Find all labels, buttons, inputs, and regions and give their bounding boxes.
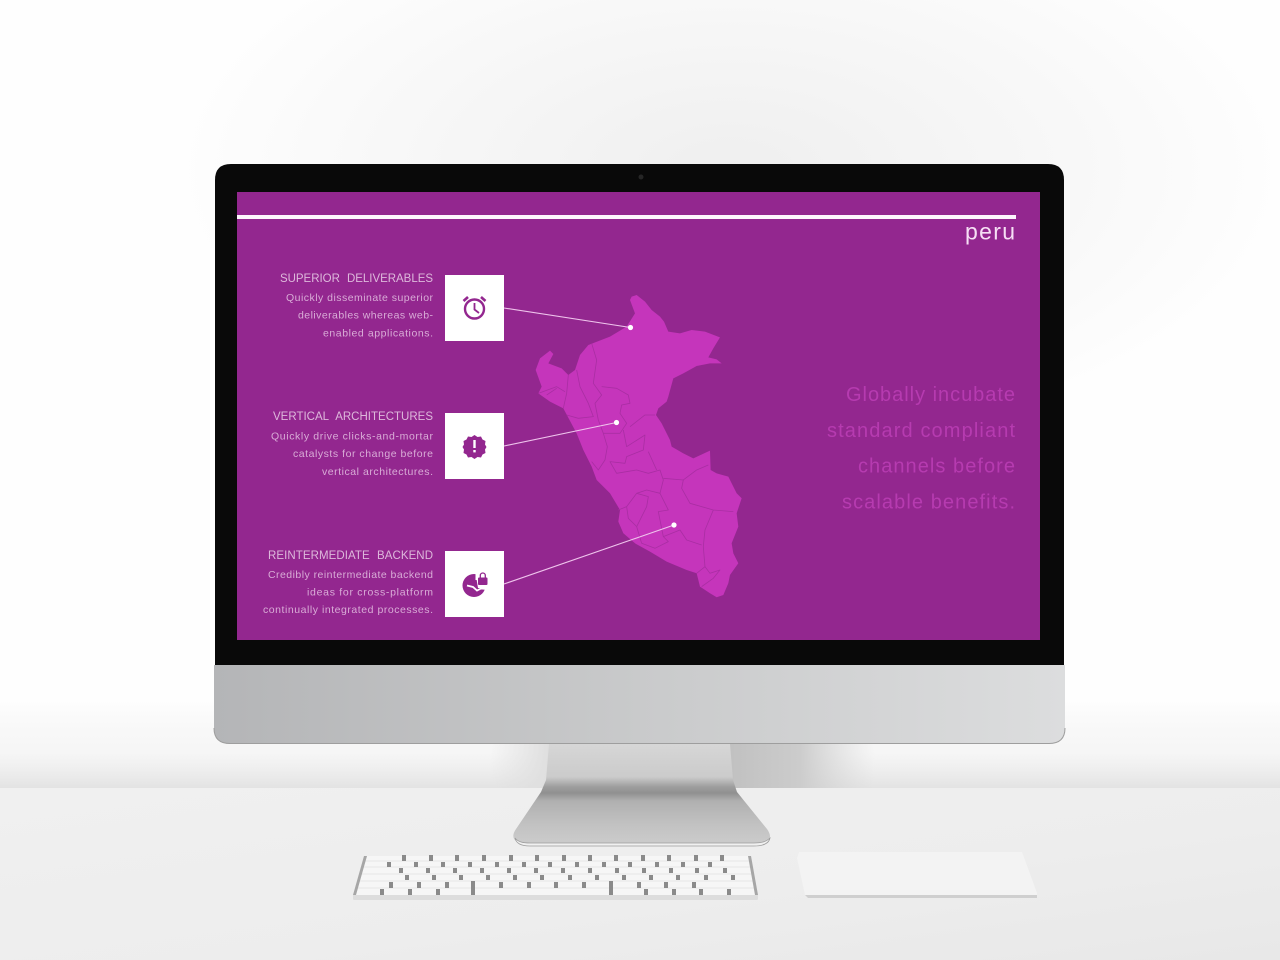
text block: vertical architectures: catalysts for change before [293, 448, 433, 460]
icon card: alert badge [445, 413, 504, 479]
text block: vertical architectures: Quickly drive clicks-and-mortar [271, 430, 434, 442]
monitor shadow left of stand [490, 744, 550, 788]
soft wall glow [0, 0, 1280, 480]
text block: reintermediate backend: Credibly reintermediate backend [268, 569, 433, 581]
text block: superior deliverables [280, 273, 434, 340]
desk surface [0, 788, 1280, 960]
screen slide [237, 192, 1040, 640]
connector: architectures [504, 420, 619, 446]
text block: vertical architectures: VERTICAL ARCHITECTURES [273, 411, 433, 423]
connector: backend [504, 522, 677, 584]
region borders [538, 343, 733, 587]
text block: superior deliverables: Quickly disseminate superior [286, 292, 434, 304]
lower wall shade [0, 700, 1280, 788]
header rule [237, 215, 1016, 219]
faded statement text: channels before [858, 456, 1015, 478]
text block: vertical architectures: vertical architectures. [322, 466, 433, 478]
faded statement text: scalable benefits. [842, 492, 1015, 514]
webcam [638, 174, 644, 180]
connector: deliverables [504, 308, 633, 330]
map of Peru [536, 295, 742, 597]
text block: reintermediate backend [263, 550, 433, 616]
text block: superior deliverables: SUPERIOR DELIVERABLES [280, 273, 433, 285]
faded statement text [827, 384, 1015, 514]
faded statement text: Globally incubate [846, 384, 1015, 406]
icon card: globe with lock [445, 551, 504, 617]
text block: reintermediate backend: ideas for cross-platform [307, 586, 433, 598]
icon card: alarm clock [445, 275, 504, 341]
text block: superior deliverables: enabled applications. [323, 328, 433, 340]
text block: reintermediate backend: REINTERMEDIATE BACKEND [268, 550, 433, 562]
text block: reintermediate backend: continually integrated processes. [263, 604, 433, 616]
faded statement text: standard compliant [827, 420, 1015, 442]
title: peru [965, 218, 1015, 244]
text block: superior deliverables: deliverables whereas web- [298, 310, 434, 322]
monitor chin [214, 665, 1065, 744]
keyboard [353, 855, 758, 900]
monitor bezel [215, 164, 1064, 665]
trackpad [797, 852, 1037, 898]
monitor shadow right of stand [725, 744, 875, 788]
monitor stand [513, 744, 770, 846]
text block: vertical architectures [271, 411, 434, 478]
